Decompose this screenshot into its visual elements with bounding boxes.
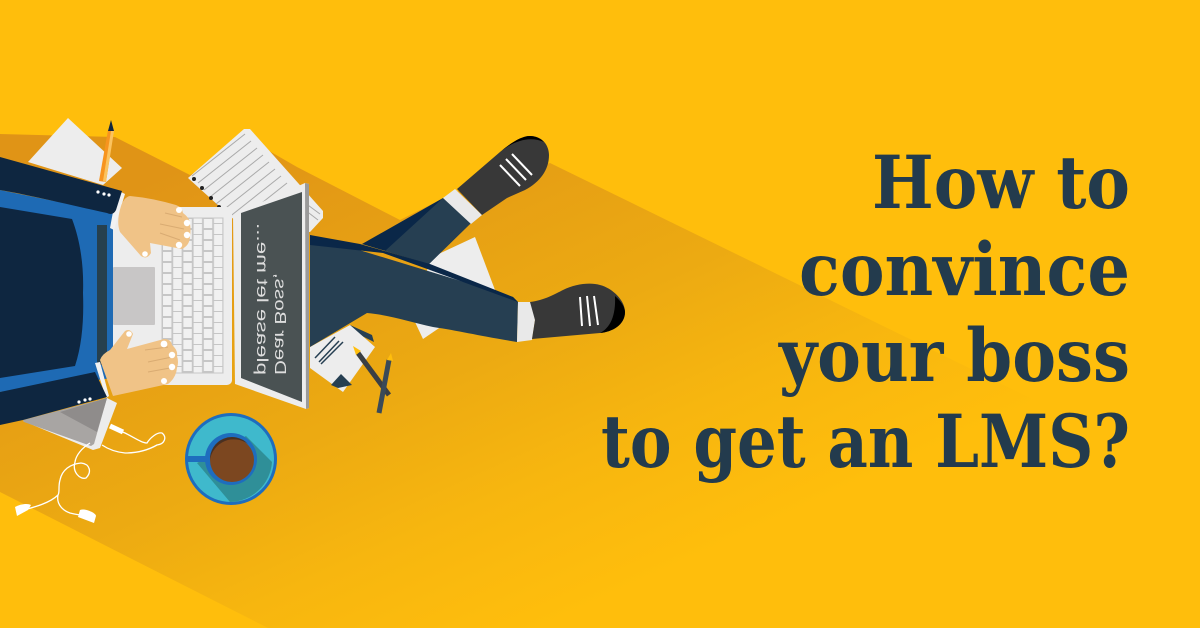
illustration: person working on laptop xyxy=(0,118,625,523)
paper top left xyxy=(28,118,122,185)
title: convince xyxy=(799,227,1130,313)
laptop xyxy=(108,183,309,409)
laptop screen xyxy=(233,183,309,409)
notebook xyxy=(188,129,323,232)
bottom sleeve xyxy=(0,362,109,425)
upper leg xyxy=(362,198,471,264)
hands xyxy=(100,196,190,396)
legs xyxy=(310,136,625,347)
top hand xyxy=(118,196,190,257)
bottom hand xyxy=(100,330,178,396)
coffee cup xyxy=(185,413,277,505)
upper shoe xyxy=(457,136,549,215)
screen text xyxy=(253,223,288,375)
torso xyxy=(0,157,125,425)
top sleeve xyxy=(0,157,125,230)
title: How to xyxy=(872,140,1130,226)
small note with pencils xyxy=(310,325,393,413)
title xyxy=(601,140,1130,485)
shirt xyxy=(0,190,113,392)
pencil xyxy=(99,120,114,182)
lower leg xyxy=(310,235,518,347)
long cast shadow xyxy=(0,134,1200,628)
title: your boss xyxy=(778,313,1130,399)
screen text: please let me... xyxy=(253,223,270,375)
phone and earphones xyxy=(15,398,165,523)
keyboard xyxy=(162,218,223,373)
screen text: Dear Boss, xyxy=(271,273,288,375)
lower shoe xyxy=(530,284,625,339)
trackpad xyxy=(113,267,155,325)
paper under legs xyxy=(415,237,495,339)
